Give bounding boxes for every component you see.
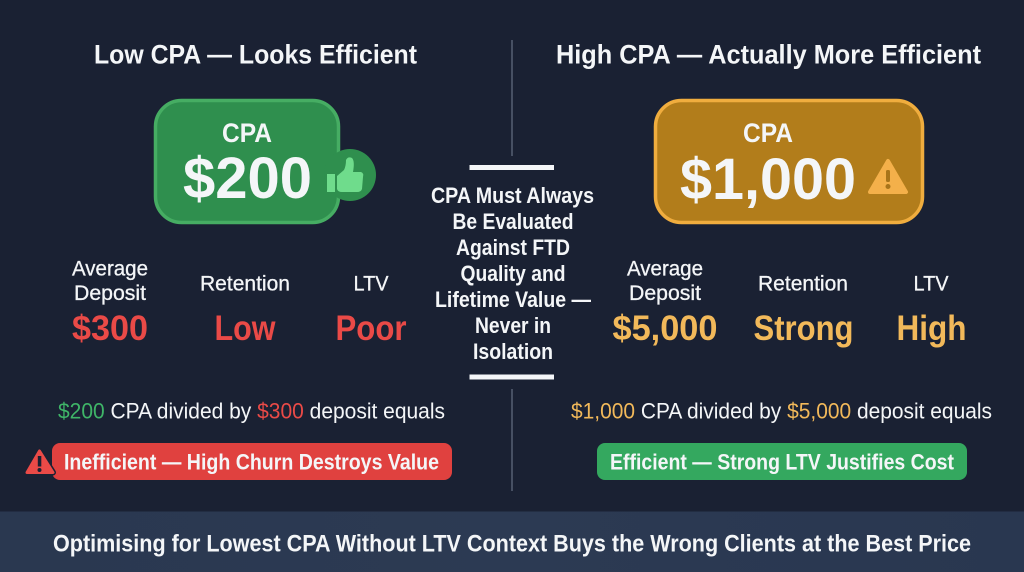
text: high CPA equation: $1,000 CPA divided by $5,000 deposit equals xyxy=(571,398,992,424)
panel: high CPA badge: CPA xyxy=(743,118,793,148)
metric: high retention: Strong xyxy=(754,309,854,348)
metric: low average deposit: $300 xyxy=(72,309,148,348)
metric: low retention: Retention xyxy=(200,272,290,296)
verdict: inefficient xyxy=(27,443,452,480)
callout: centre message: Lifetime Value — xyxy=(435,287,591,312)
callout: centre message: Quality and xyxy=(460,261,566,286)
metric: low retention xyxy=(200,272,290,348)
panel: low CPA badge: $200 xyxy=(183,146,312,211)
panel: high CPA badge xyxy=(656,100,922,222)
metric: high LTV xyxy=(896,272,966,348)
panel: low CPA badge: CPA xyxy=(222,118,272,148)
metric: low average deposit xyxy=(72,256,148,348)
icon: thumbs up xyxy=(327,157,363,192)
metric: high LTV: LTV xyxy=(914,272,949,296)
metric: high average deposit: Average xyxy=(627,256,703,280)
verdict: inefficient: Inefficient — High Churn Destroys Value xyxy=(64,450,439,474)
footer banner xyxy=(0,512,1024,572)
heading: low CPA: Low CPA — Looks Efficient xyxy=(94,40,417,70)
metric: low LTV: LTV xyxy=(354,272,389,296)
metric: low retention: Low xyxy=(214,309,276,348)
verdict: efficient xyxy=(597,443,967,480)
centre divider xyxy=(511,40,513,491)
metric: low average deposit: Average xyxy=(72,256,148,280)
heading: high CPA: High CPA — Actually More Efficient xyxy=(556,40,981,70)
metric: high retention: Retention xyxy=(758,272,848,296)
panel: low CPA badge xyxy=(156,100,376,222)
metric: high average deposit: Deposit xyxy=(629,281,701,305)
callout: centre message: Against FTD xyxy=(456,235,570,260)
metric: low average deposit: Deposit xyxy=(74,281,146,305)
metric: high LTV: High xyxy=(896,309,966,348)
callout: centre message: Never in xyxy=(475,313,551,338)
icon: warning triangle xyxy=(27,451,53,472)
metric: low LTV: Poor xyxy=(336,309,407,348)
metric: low LTV xyxy=(336,272,407,348)
text: low CPA equation: $200 CPA divided by $300 deposit equals xyxy=(58,398,445,424)
panel: high CPA badge: $1,000 xyxy=(680,147,856,212)
icon: warning triangle xyxy=(870,161,906,192)
callout: centre message: CPA Must Always xyxy=(431,183,594,208)
metric: high average deposit: $5,000 xyxy=(612,309,718,348)
verdict: efficient: Efficient — Strong LTV Justifies Cost xyxy=(610,450,955,474)
callout: centre message: Isolation xyxy=(473,339,553,364)
callout: centre message xyxy=(431,165,594,380)
metric: high retention xyxy=(754,272,854,348)
metric: high average deposit xyxy=(612,256,718,348)
callout: centre message: Be Evaluated xyxy=(452,209,574,234)
